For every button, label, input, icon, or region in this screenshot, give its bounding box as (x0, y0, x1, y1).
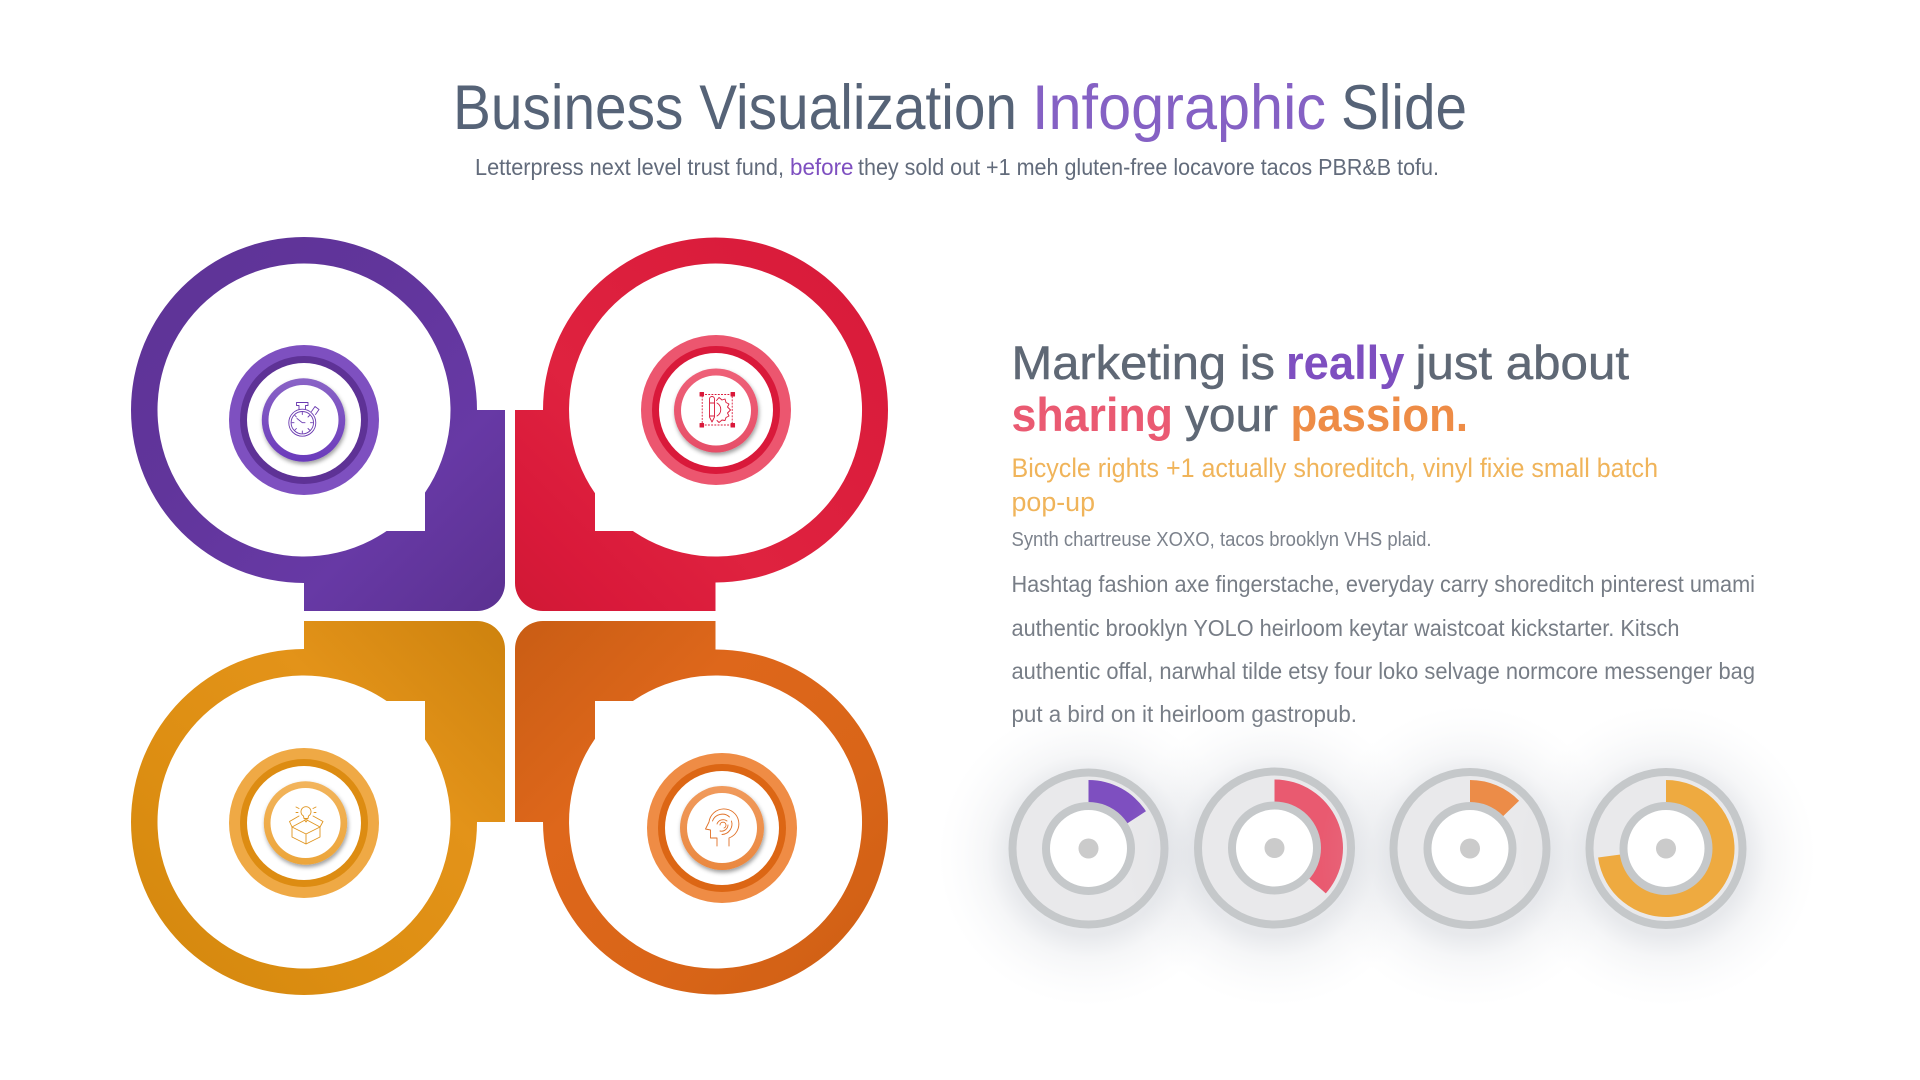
orange subheading: pop-up (1012, 487, 1095, 517)
yellow ring shape (131, 621, 505, 995)
donut chart 4: yellow (1516, 706, 1816, 1006)
panel: yellow speech ring (131, 621, 505, 995)
orange subheading: Bicycle rights +1 actually shoreditch, vinyl fixie small batch (1012, 453, 1658, 483)
orange outer badge (647, 753, 797, 903)
heading: really (1286, 336, 1404, 389)
body paragraph: put a bird on it heirloom gastropub. (1012, 701, 1357, 727)
yellow inner badge (264, 781, 347, 865)
red ring shape (515, 238, 888, 611)
heading: passion. (1290, 388, 1468, 441)
purple outer badge (229, 345, 379, 495)
red inner badge (674, 368, 758, 452)
yellow outer badge (229, 748, 379, 898)
subtitle: Letterpress next level trust fund, (475, 154, 784, 180)
donut chart 3: orange (1320, 706, 1620, 1006)
title: Slide (1341, 73, 1467, 143)
heading (1012, 336, 1629, 441)
body paragraph: authentic offal, narwhal tilde etsy four loko selvage normcore messenger bag (1012, 658, 1755, 684)
heading: Marketing is (1012, 336, 1275, 389)
title: Business Visualization (453, 73, 1017, 143)
body paragraph: Hashtag fashion axe fingerstache, everyday carry shoreditch pinterest umami (1012, 571, 1755, 597)
panel: orange speech ring (515, 621, 888, 995)
icon: pencil and gear (700, 392, 735, 427)
subtitle: they sold out +1 meh gluten-free locavore tacos PBR&B tofu. (858, 154, 1439, 180)
red outer badge (641, 335, 791, 485)
heading: sharing (1012, 388, 1173, 441)
orange ring shape (515, 621, 888, 995)
purple ring shape (131, 237, 505, 611)
body paragraph: authentic brooklyn YOLO heirloom keytar waistcoat kickstarter. Kitsch (1012, 615, 1680, 641)
donut chart 1: purple (938, 706, 1238, 1006)
donut chart 2: red (1124, 706, 1424, 1006)
title (453, 73, 1467, 143)
icon: head with maze (706, 809, 739, 846)
heading: your (1185, 388, 1278, 441)
purple inner badge (262, 378, 345, 462)
panel: red speech ring (515, 238, 888, 611)
body paragraph (1012, 571, 1755, 727)
heading: just about (1413, 336, 1629, 389)
small note: Synth chartreuse XOXO, tacos brooklyn VHS plaid. (1012, 529, 1432, 551)
subtitle: before (790, 154, 854, 180)
orange inner badge (680, 786, 764, 870)
subtitle (475, 154, 1439, 180)
icon: stopwatch (289, 402, 319, 436)
title: Infographic (1032, 73, 1326, 143)
icon: idea box (290, 807, 323, 844)
orange subheading (1012, 453, 1658, 517)
panel: purple speech ring (131, 237, 505, 611)
